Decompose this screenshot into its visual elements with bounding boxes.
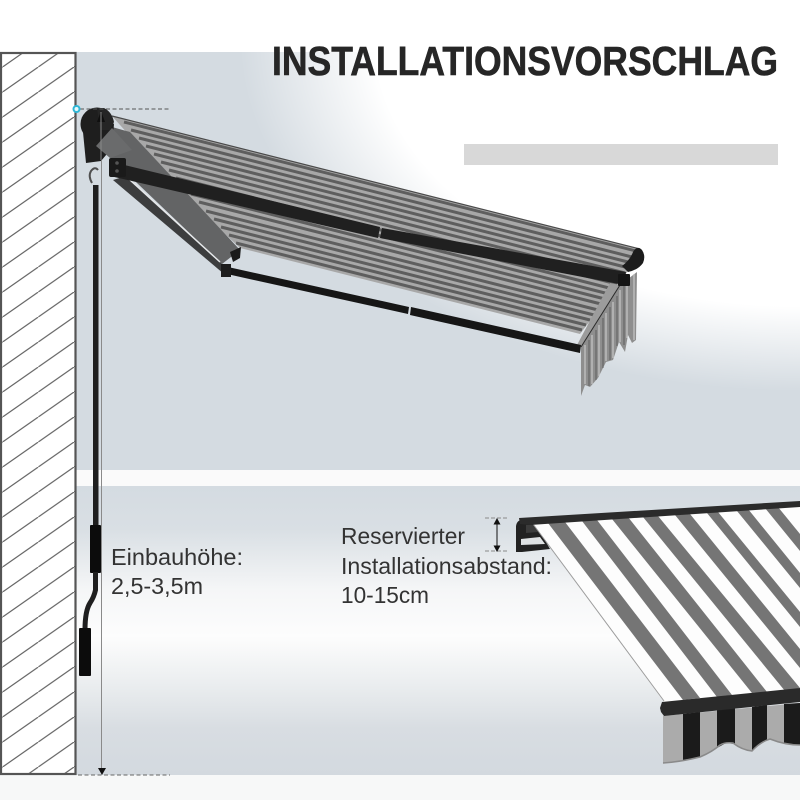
lower support bar: [227, 267, 581, 353]
clearance dimension arrow: [485, 518, 509, 552]
label: mounting height: 2,5-3,5m: [111, 573, 203, 599]
crank handle: [79, 628, 91, 676]
background: upper panel: [76, 52, 800, 470]
label: reserved installation distance: Installationsabstand:: [341, 553, 552, 579]
rod grip: [90, 525, 101, 573]
label: reserved installation distance: [341, 523, 552, 608]
front valance: [581, 272, 637, 396]
white fabric base: [533, 506, 800, 702]
folding arm: [97, 127, 241, 277]
front bar: [660, 688, 800, 716]
label: mounting height: [111, 544, 243, 599]
wall cross-section: [1, 53, 76, 774]
icon: cyan mounting point: [74, 106, 80, 112]
fabric side edge: [533, 524, 664, 701]
grey fabric stripes: [548, 507, 800, 700]
crank rod: [79, 168, 101, 676]
fabric top edge: [112, 116, 640, 249]
rod shaft: [93, 185, 98, 527]
front valance: [663, 703, 800, 763]
end cap: [618, 248, 644, 286]
label: reserved installation distance: Reservierter: [341, 523, 465, 549]
subtitle placeholder bar: [464, 144, 778, 165]
wall bracket: [516, 520, 550, 552]
rod hook: [90, 168, 98, 183]
main front bar: [109, 158, 626, 285]
roller and wall bracket: [80, 108, 132, 163]
front edge of fabric: [577, 283, 620, 347]
label: mounting height: Einbauhöhe:: [111, 544, 243, 570]
top cassette bar: [519, 501, 800, 525]
awning front view: [516, 501, 800, 763]
awning side view: [80, 100, 660, 396]
striped fabric: [112, 116, 636, 334]
label: reserved installation distance: 10-15cm: [341, 582, 429, 608]
background: lower panel: [0, 470, 800, 800]
height dimension line: [78, 109, 170, 775]
rod bend: [85, 572, 96, 630]
